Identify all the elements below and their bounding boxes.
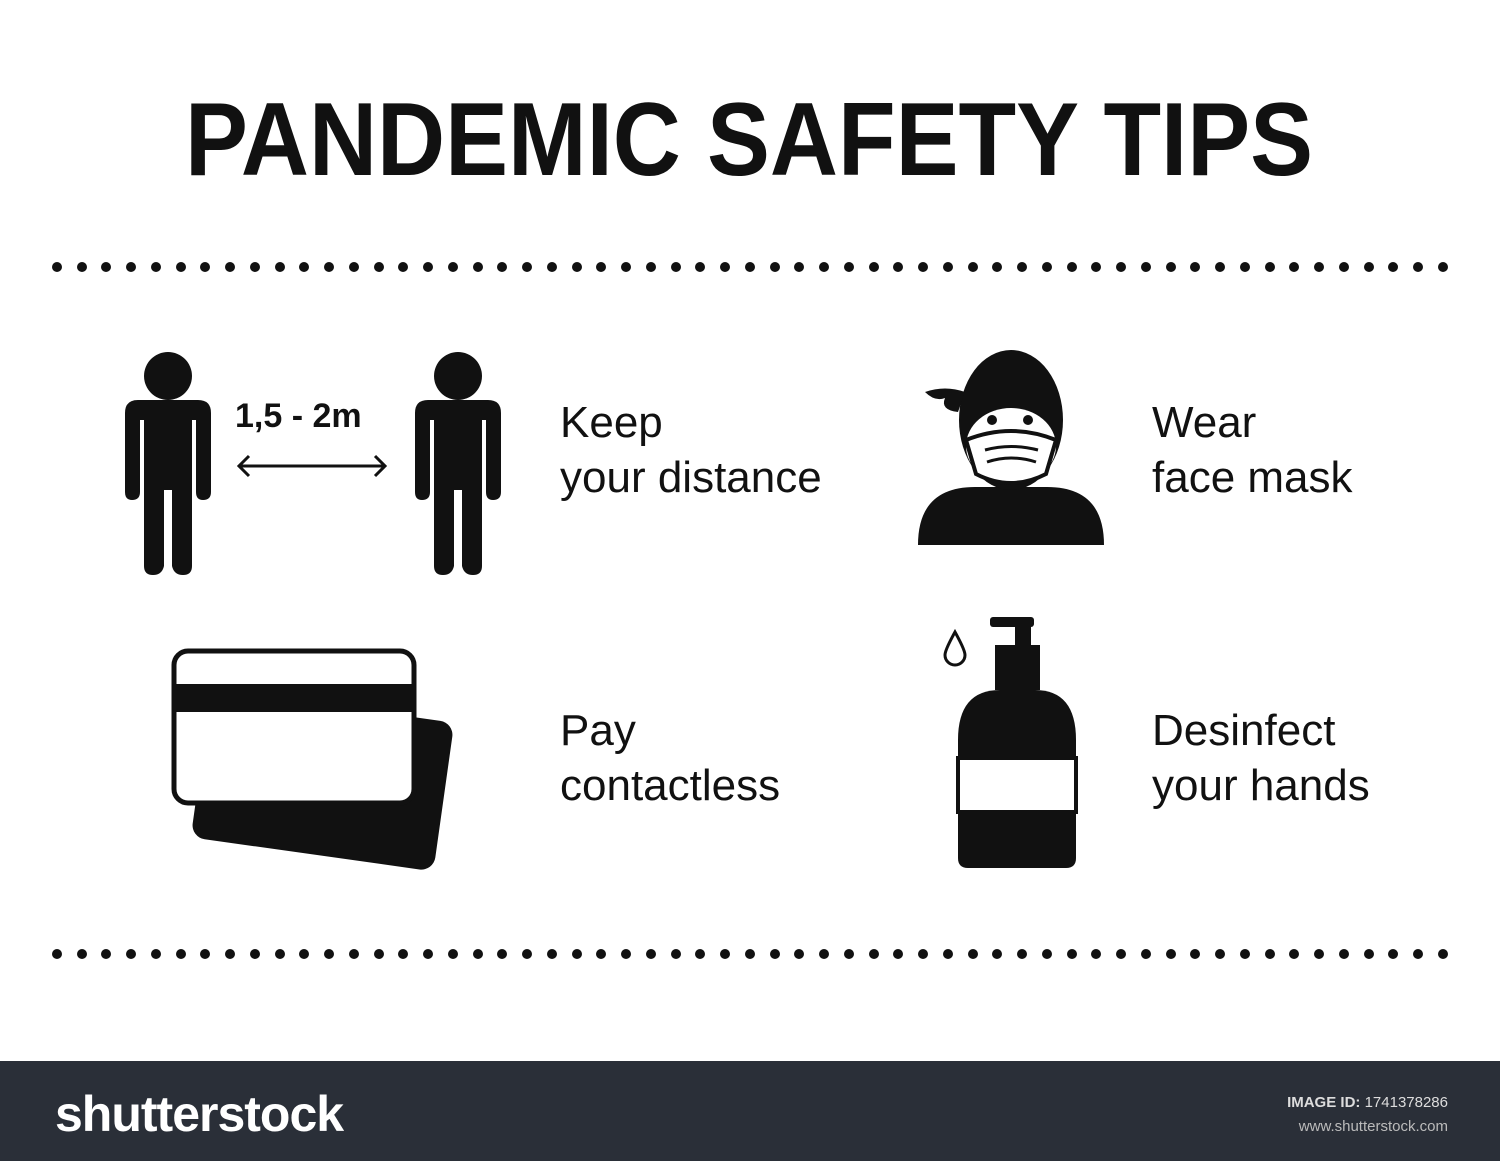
text: pay contactless: contactless [560,761,780,810]
text: keep your distance: your distance [560,453,822,502]
icon: cards [174,651,454,871]
text: disinfect your hands: Desinfect [1152,706,1335,755]
text: keep your distance: Keep [560,398,663,447]
footer bar [0,1061,1500,1161]
text: pay contactless: Pay [560,706,636,755]
icon: two people distance: 1,5 - 2m [235,397,362,435]
text: wear face mask: Wear [1152,398,1256,447]
footer logo: shutterstock [55,1086,343,1142]
icon: face mask [918,350,1104,545]
title: PANDEMIC SAFETY TIPS [185,82,1313,198]
icon: sanitizer bottle [945,617,1076,868]
footer image id: IMAGE ID: 1741378286 [1287,1094,1448,1111]
icon: two people distance [125,352,501,575]
text: disinfect your hands: your hands [1152,761,1370,810]
footer image id [1287,1094,1448,1135]
text: wear face mask: face mask [1152,453,1354,502]
footer image id: www.shutterstock.com [1299,1118,1448,1135]
